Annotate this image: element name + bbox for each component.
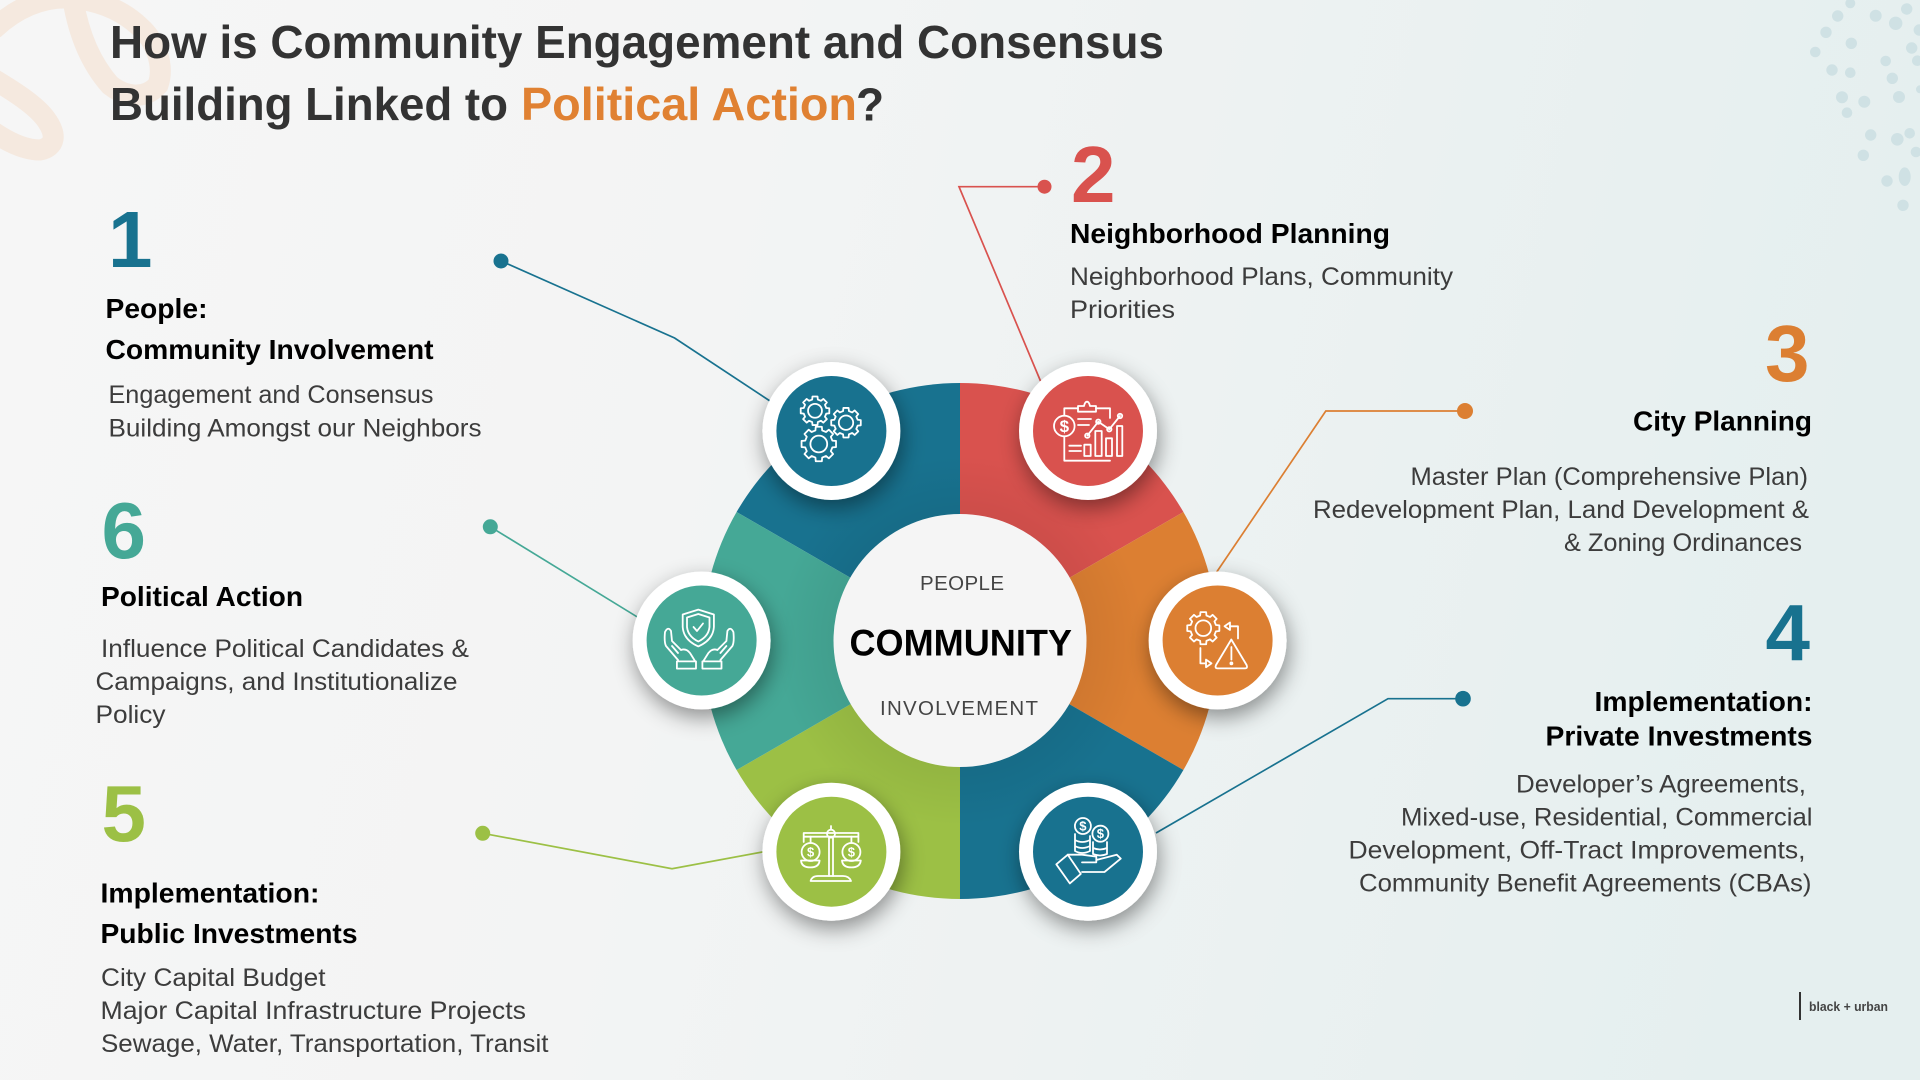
description 3: Redevelopment Plan, Land Development & [1313,496,1809,524]
description 2 [1070,263,1454,324]
heading 4: Private Investments [1546,721,1812,752]
description 4: Community Benefit Agreements (CBAs) [1359,870,1812,898]
description 4 [1348,771,1812,898]
description 6: Policy [96,701,166,729]
decorative dots top-right [1810,0,1920,211]
description 3: & Zoning Ordinances [1564,529,1802,557]
connector: item 3 [1217,403,1473,572]
center hub [834,514,1086,767]
segment 5 green [737,641,960,899]
node 2: clipboard chart icon [1019,362,1157,500]
description 5: City Capital Budget [101,964,326,992]
title: ? [856,78,884,130]
description 4: Development, Off-Tract Improvements, [1348,837,1806,865]
panel: 1 people community involvement [106,195,482,442]
heading 2: Neighborhood Planning [1070,218,1390,249]
heading 1: People: [106,293,208,324]
panel: 4 private investments [1348,588,1812,898]
heading 4: Implementation: [1594,686,1812,717]
segment 3 orange [960,512,1218,770]
node 2: clipboard chart icon: $ [1060,417,1070,436]
panel: 6 political action [96,486,469,729]
description 1 [108,381,482,442]
node 1: gears icon [762,362,900,500]
description 4: Mixed-use, Residential, Commercial [1401,804,1812,832]
title: How is Community Engagement and Consensus [110,16,1164,68]
node 3: gear and warning icon [1149,572,1287,710]
heading 1: Community Involvement [106,334,433,365]
title: Political Action [521,78,857,130]
description 6 [96,635,469,729]
hub label community: COMMUNITY [850,622,1072,664]
description 2: Neighborhood Plans, Community [1070,263,1454,291]
brand mark [1799,992,1888,1020]
description 5 [100,964,549,1058]
node 5: balance scale icon: $ [848,844,856,860]
segment 2 red [960,383,1183,641]
description 6: Campaigns, and Institutionalize [96,668,458,696]
title: Building Linked to [110,78,508,130]
description 5: Major Capital Infrastructure Projects [100,997,526,1025]
description 6: Influence Political Candidates & [101,635,469,663]
heading 3: City Planning [1633,406,1812,436]
connector: item 1 [494,254,770,401]
hub label involvement: INVOLVEMENT [880,697,1038,720]
heading 4 [1546,686,1812,752]
number 6: 6 [102,486,146,575]
segment 1 blue [737,383,960,641]
brand mark: black + urban [1809,1000,1888,1014]
hub label people: PEOPLE [920,572,1004,595]
panel: 5 public investments [100,769,549,1058]
segment 6 teal [702,512,960,770]
panel: 2 neighborhood planning [1070,130,1454,324]
number 5: 5 [102,769,146,858]
decorative squiggle top-left [0,0,160,150]
description 1: Building Amongst our Neighbors [108,414,482,442]
number 4: 4 [1766,588,1810,677]
heading 1 [106,293,433,365]
connector: item 4 [1156,691,1471,833]
number 3: 3 [1765,309,1810,398]
heading 5: Implementation: [100,878,320,908]
connector: item 5 [475,826,764,869]
heading 5 [100,878,358,949]
segment 4 blue [960,641,1183,899]
description 5: Sewage, Water, Transportation, Transit [101,1030,549,1058]
heading 5: Public Investments [100,918,358,949]
node 4: hand with coins icon: $ [1079,818,1087,834]
node 4: hand with coins icon: $ [1097,826,1105,841]
node 4: hand with coins icon [1019,783,1157,921]
number 2: 2 [1071,130,1116,219]
description 1: Engagement and Consensus [108,381,434,409]
title [110,16,1164,130]
number 1: 1 [108,195,152,284]
wheel: six segments [702,383,1218,899]
description 3: Master Plan (Comprehensive Plan) [1410,463,1808,491]
description 4: Developer’s Agreements, [1516,771,1806,799]
node 5: balance scale icon [762,783,900,921]
connector: item 6 [483,519,637,617]
connector: item 2 [959,180,1052,381]
description 2: Priorities [1070,296,1175,324]
description 3 [1313,463,1809,557]
node 5: balance scale icon: $ [807,844,815,860]
heading 6: Political Action [101,581,303,612]
panel: 3 city planning [1313,309,1812,557]
node 6: shield in hands icon [633,572,771,710]
